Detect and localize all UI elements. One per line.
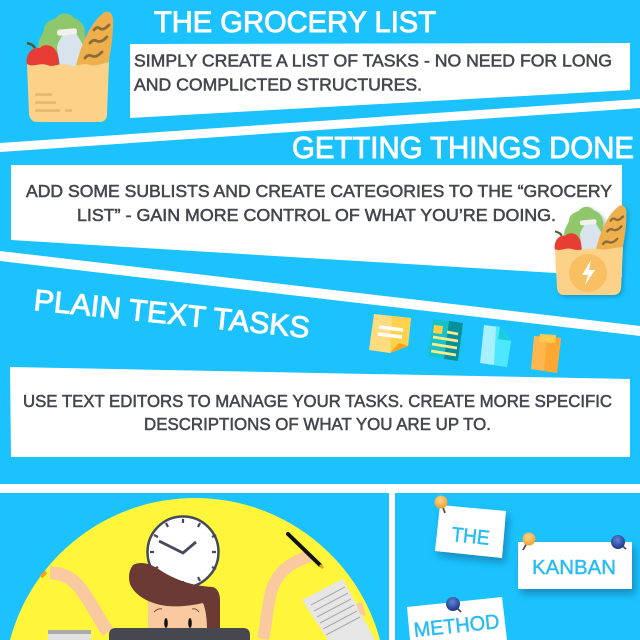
pen <box>288 534 323 568</box>
text panel: grocery list: AND COMPLICTED STRUCTURES. <box>134 74 422 94</box>
text panel: plain text tasks: DESCRIPTIONS OF WHAT YOU ARE UP TO. <box>144 414 491 434</box>
sticky note: the <box>435 505 506 558</box>
face <box>148 596 208 632</box>
sticky note: the: THE <box>450 523 491 550</box>
text panel: getting things done: ADD SOME SUBLISTS AND CREATE CATEGORIES TO THE “GROCERY <box>26 181 612 201</box>
icon: grocery bag <box>27 12 113 122</box>
text panel: plain text tasks <box>10 367 630 457</box>
clock <box>148 516 218 588</box>
orange item in left hand <box>41 572 46 577</box>
sticky note: kanban: KANBAN <box>532 556 616 579</box>
text panel: getting things done <box>11 165 622 277</box>
icon: document with text lines <box>428 319 463 361</box>
pin: orange on kanban <box>522 532 536 550</box>
heading: plain text tasks: PLAIN TEXT TASKS <box>32 284 311 345</box>
section: the grocery list <box>27 6 630 122</box>
monitor <box>109 628 250 640</box>
paper stack <box>48 630 91 640</box>
section: plain text tasks <box>10 284 630 457</box>
white frame divider <box>389 484 395 640</box>
yellow circle backdrop <box>10 498 380 640</box>
icon: blank file <box>480 325 511 367</box>
white frame band <box>0 484 640 493</box>
text panel: grocery list <box>130 43 630 118</box>
heading: the grocery list: THE GROCERY LIST <box>154 6 436 39</box>
pin: orange on the <box>434 496 448 513</box>
illustration: busy worker <box>10 498 380 640</box>
diagonal divider upper <box>0 99 640 152</box>
document held in hand <box>302 579 375 640</box>
text panel: getting things done: LIST” - GAIN MORE CONTROL OF WHAT YOU’RE DOING. <box>77 205 556 225</box>
pin: blue on kanban <box>611 535 626 549</box>
right arm <box>263 556 310 639</box>
section: getting things done <box>11 130 634 295</box>
sticky note: method <box>407 597 507 640</box>
diagonal divider lower <box>0 251 640 336</box>
sticky note: kanban <box>518 542 632 589</box>
pin: blue on method <box>446 597 461 612</box>
hair <box>129 563 220 630</box>
eyes and brows <box>154 609 199 628</box>
left arm <box>50 573 108 632</box>
icon: sticky note <box>369 314 411 353</box>
text panel: grocery list: SIMPLY CREATE A LIST OF TASKS - NO NEED FOR LONG <box>134 50 612 70</box>
text panel: plain text tasks: USE TEXT EDITORS TO MANAGE YOUR TASKS. CREATE MORE SPECIFIC <box>23 391 612 411</box>
icon: clipboard <box>531 334 561 373</box>
icon: grocery bag with lightning <box>555 205 627 295</box>
